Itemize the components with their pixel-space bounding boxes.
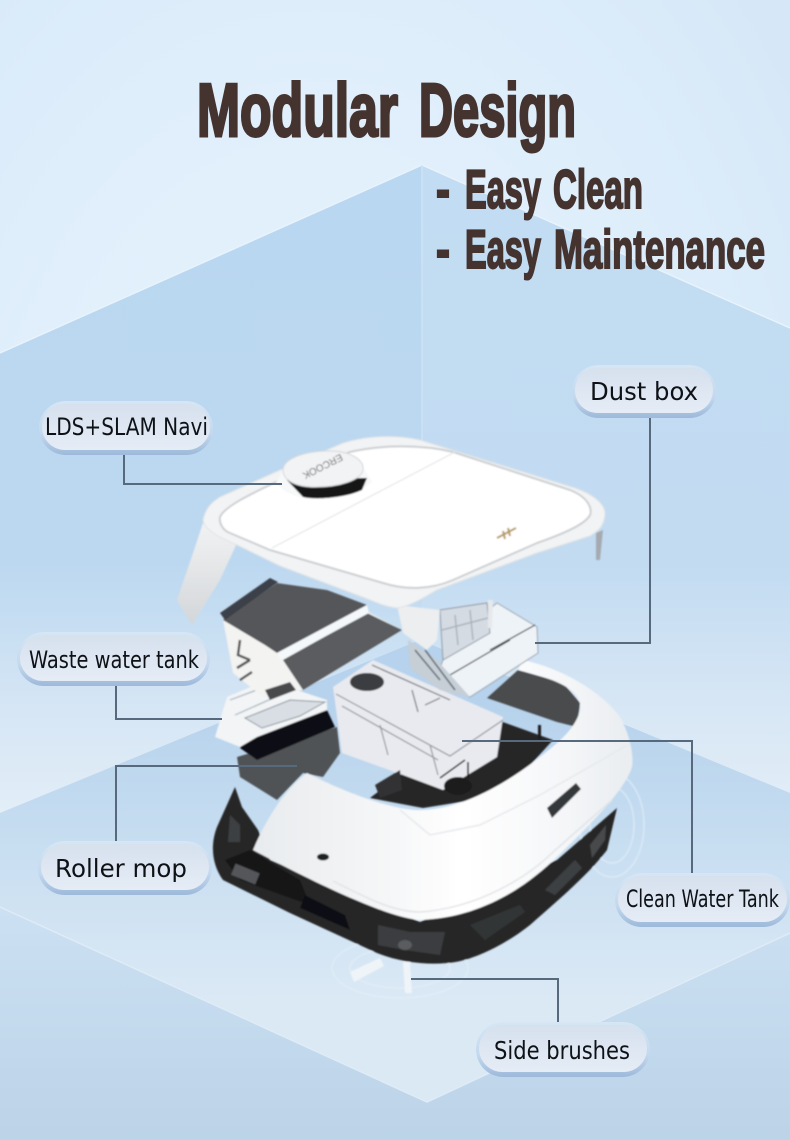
roller mop assembly	[220, 578, 402, 700]
robot: exploded view	[177, 436, 644, 998]
clean water tank	[333, 660, 503, 798]
side brushes	[403, 962, 412, 993]
connector: Waste water tank	[116, 685, 222, 719]
pill: Waste water tank: Waste water tank	[29, 646, 199, 674]
connector: Clean Water Tank	[462, 741, 692, 873]
lid post and underside	[397, 605, 440, 650]
lid side flap	[177, 523, 237, 625]
title: Modular	[197, 68, 398, 152]
pill: Side brushes	[476, 1022, 650, 1077]
connector: LDS+SLAM Navi	[124, 455, 282, 484]
subtitle: easy clean: -	[436, 158, 450, 220]
pill: Side brushes: Side brushes	[494, 1036, 630, 1065]
pill: Roller mop	[38, 841, 212, 895]
white body shell	[253, 660, 632, 920]
pill: Waste water tank	[17, 632, 210, 686]
subtitle: easy clean: Easy	[465, 158, 541, 220]
gold logo on lid	[497, 528, 516, 539]
title: Design	[419, 68, 576, 152]
subtitle: easy clean: Clean	[553, 158, 643, 220]
pill: Roller mop: Roller mop	[55, 854, 187, 883]
connector: Roller mop	[116, 766, 297, 841]
pill: Dust box: Dust box	[590, 377, 698, 406]
pill: Dust box	[572, 365, 716, 418]
pill: LDS+SLAM Navi: LDS+SLAM Navi	[45, 413, 208, 441]
pill: LDS+SLAM Navi	[39, 401, 213, 455]
lid top	[203, 436, 605, 608]
dark interior of body	[370, 720, 553, 808]
dark chassis base	[213, 787, 617, 964]
lidar turret: ERCOOK	[300, 451, 344, 481]
subtitle: easy clean	[436, 158, 643, 220]
gray tray and waste water tank	[215, 680, 340, 800]
subtitle: easy maintenance: -	[436, 218, 450, 280]
connector: Side brushes	[411, 979, 558, 1022]
pill: Clean Water Tank	[615, 873, 790, 927]
subtitle: easy maintenance	[436, 218, 765, 280]
connector: Dust box	[535, 418, 650, 643]
dust box	[408, 603, 538, 697]
floor ripples around side brushes	[332, 773, 644, 998]
lidar turret	[276, 451, 372, 499]
subtitle: easy maintenance: Easy	[465, 218, 541, 280]
